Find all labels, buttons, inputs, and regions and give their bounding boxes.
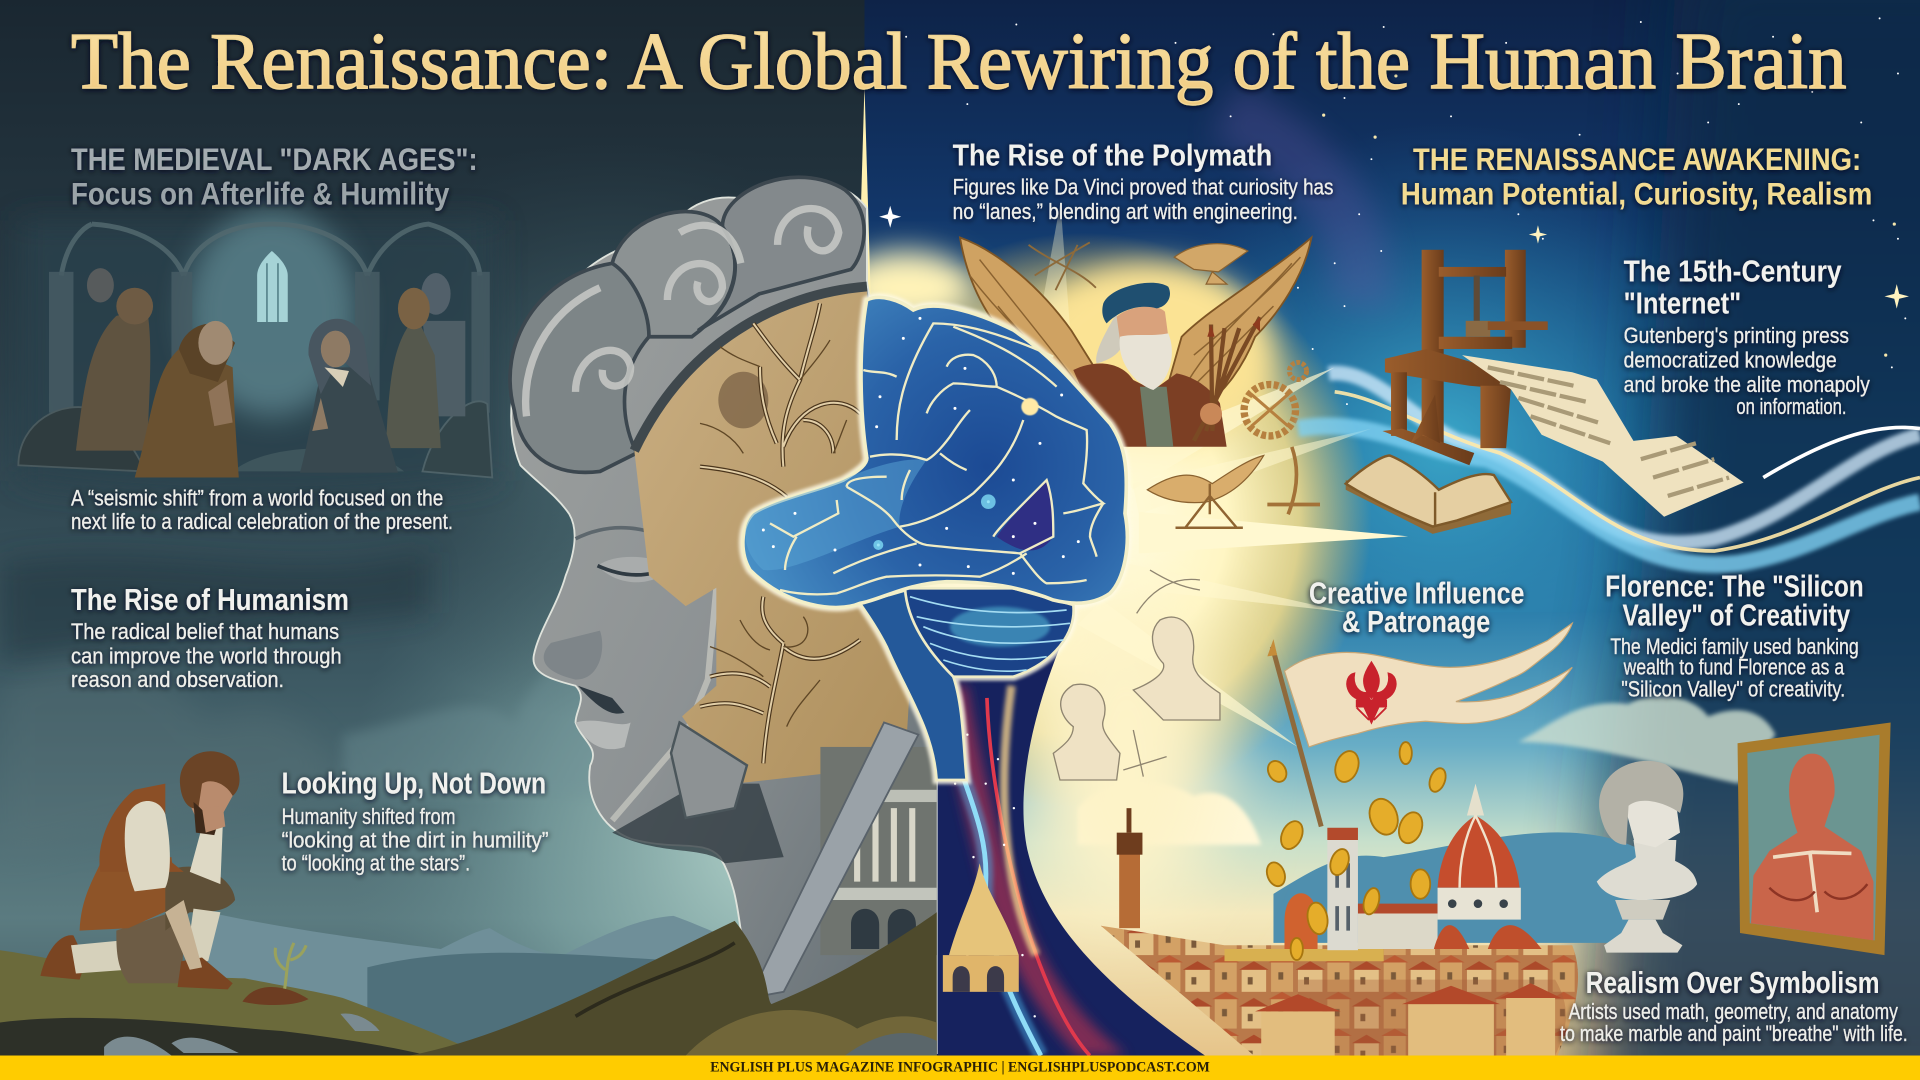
text block: the rise of humanism: can improve the world through (71, 644, 342, 669)
cerebellum (905, 588, 1074, 677)
open book (1346, 480, 1511, 534)
flyer sketch (1174, 244, 1248, 284)
text block: the 15th-century internet: Gutenberg's printing press (1624, 323, 1849, 348)
text block: looking up, not down: Humanity shifted from (282, 804, 456, 829)
building in neck (820, 747, 937, 955)
text block: the rise of humanism: The Rise of Humanism (71, 583, 349, 617)
heading: medieval dark ages: Focus on Afterlife & Humility (71, 175, 450, 211)
brain body (743, 297, 1127, 608)
text block: looking up, not down (282, 766, 549, 876)
sprout (275, 943, 306, 992)
text block: creative influence and patronage: Creative Influence (1309, 577, 1524, 611)
heading: medieval dark ages (71, 141, 478, 211)
text block: the rise of the polymath: no “lanes,” blending art with engineering. (953, 199, 1298, 224)
text block: florence silicon valley (1605, 569, 1864, 702)
text block: looking up, not down: Looking Up, Not Down (282, 766, 546, 800)
brushes (1194, 317, 1260, 441)
text block: the 15th-century internet: on information. (1736, 394, 1847, 419)
text block: the 15th-century internet: democratized knowledge (1624, 347, 1837, 372)
brain tree branches (700, 303, 860, 763)
Duomo dome (1438, 816, 1520, 888)
head silhouette (511, 179, 937, 1053)
text: seismic shift: A “seismic shift” from a world focused on the (71, 486, 443, 511)
gold coins (1264, 742, 1449, 960)
purple nebula (997, 480, 1053, 550)
heading: renaissance awakening (1401, 141, 1872, 211)
paper ribbon (1462, 355, 1744, 517)
starfield (906, 18, 1905, 404)
clouds (1518, 696, 1776, 784)
monks (76, 268, 465, 478)
background: dark medieval side (0, 0, 955, 1080)
cathedral nave (1358, 912, 1438, 949)
text block: the rise of the polymath: The Rise of the Polymath (953, 138, 1272, 172)
light waves (1298, 373, 1920, 565)
city base (1101, 926, 1578, 1056)
face (1117, 306, 1168, 340)
text block: the rise of humanism: reason and observation. (71, 667, 284, 692)
classical sketch busts (1053, 570, 1220, 780)
text block: looking up, not down: to “looking at the stars”. (282, 851, 470, 876)
text block: creative influence and patronage (1309, 577, 1524, 639)
text block: florence silicon valley: wealth to fund Florence as a (1623, 655, 1845, 680)
lighter lobe (745, 459, 927, 570)
under-chin shadow (612, 784, 784, 863)
hill (0, 950, 478, 1056)
text block: the 15th-century internet: "Internet" (1624, 286, 1741, 320)
text block: the rise of humanism: The radical belief that humans (71, 619, 339, 644)
text: seismic shift (71, 486, 453, 534)
text block: creative influence and patronage: & Patronage (1342, 605, 1490, 639)
text block: looking up, not down: “looking at the dirt in humility” (282, 827, 549, 852)
text block: the 15th-century internet (1624, 255, 1870, 419)
distant mountains (1273, 832, 1653, 943)
gears (1244, 362, 1307, 436)
stones (104, 1014, 380, 1056)
hat (1102, 283, 1170, 323)
rock mound (410, 912, 937, 1056)
beard (1120, 333, 1172, 390)
exposed tan brain (634, 287, 916, 784)
pen sketch (1267, 447, 1320, 514)
jaw plate (671, 722, 747, 818)
hair (1096, 313, 1123, 363)
gyri (770, 323, 1103, 594)
footer bar: ENGLISH PLUS MAGAZINE INFOGRAPHIC | ENGLISHPLUSPODCAST.COM (710, 1059, 1210, 1075)
fleur-de-lis (1347, 662, 1396, 722)
text block: the rise of the polymath: Figures like Da Vinci proved that curiosity has (953, 175, 1333, 200)
central glowing blue brain (743, 297, 1127, 780)
Palazzo Vecchio tower (1117, 808, 1142, 928)
Giotto bell tower (1327, 839, 1358, 950)
press frame (1382, 250, 1526, 465)
neural stream (937, 637, 1205, 1056)
text block: florence silicon valley: The Medici family used banking (1610, 634, 1859, 659)
flying machine (1147, 456, 1264, 503)
background: starry renaissance side (864, 0, 1920, 1080)
wings (960, 238, 1102, 404)
marble bust of David (1597, 761, 1697, 953)
framed anatomical painting (1738, 722, 1891, 955)
St Peter dome far left (949, 863, 1019, 955)
lower sky panel (879, 0, 1920, 1080)
text block: florence silicon valley: Florence: The "Silicon (1605, 569, 1864, 603)
illustration: Florentine banner (1267, 623, 1572, 827)
illustration: da Vinci with wings and inventions (960, 238, 1320, 528)
text block: realism over symbolism (1560, 966, 1908, 1046)
illustration: printing press with flowing paper (1298, 250, 1920, 565)
text block: florence silicon valley: Valley" of Creativity (1622, 599, 1850, 633)
rocks (18, 407, 144, 471)
hair curls (510, 177, 864, 472)
robe (1073, 363, 1227, 447)
footer bar (0, 1056, 1920, 1080)
brain glow halo (743, 297, 1127, 780)
text block: florence silicon valley: "Silicon Valley" of creativity. (1621, 677, 1845, 702)
heading: medieval dark ages: THE MEDIEVAL "DARK AGES": (71, 141, 478, 177)
chapel window (257, 251, 288, 322)
text: seismic shift: next life to a radical celebration of the present. (71, 509, 453, 534)
title: The Renaissance: A Global Rewiring of the Human Brain (71, 17, 1847, 106)
neck plank (749, 722, 918, 998)
stone head (410, 177, 937, 1056)
text block: the 15th-century internet: and broke the alite monapoly (1624, 372, 1870, 397)
central sun glow (796, 86, 1408, 918)
illustration: Florence city skyline (943, 784, 1578, 1056)
text block: the rise of the polymath (953, 138, 1333, 224)
brain stem (860, 590, 967, 780)
chapel arches and pillars (61, 224, 480, 276)
heading: renaissance awakening: THE RENAISSANCE AWAKENING: (1413, 141, 1861, 177)
brain stars (763, 318, 1078, 573)
text block: the 15th-century internet: The 15th-Century (1624, 255, 1842, 289)
distant mountains (208, 912, 759, 1056)
text block: the rise of humanism (71, 583, 349, 692)
man (40, 751, 240, 989)
illustration: praying monks in chapel (18, 208, 496, 497)
illustration: kneeling man on hill (0, 751, 796, 1056)
